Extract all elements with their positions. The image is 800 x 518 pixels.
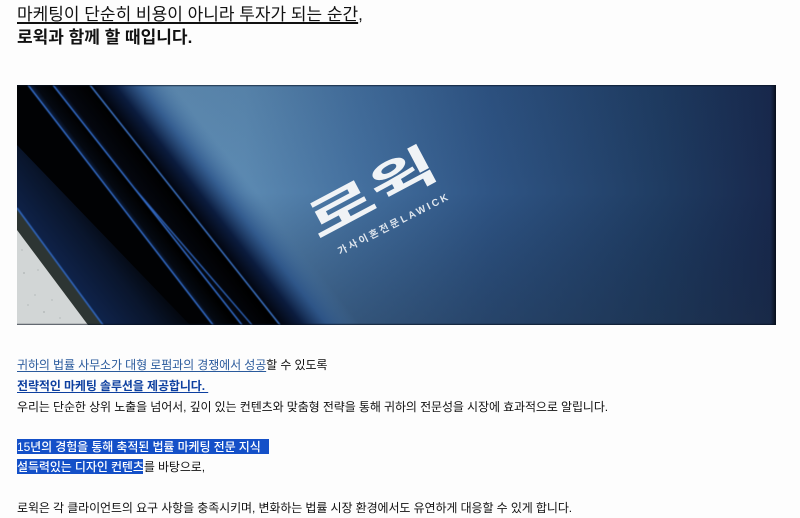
concrete speckle bbox=[22, 250, 60, 318]
heading line 1: 마케팅이 단순히 비용이 아니라 투자가 되는 순간, bbox=[17, 5, 363, 24]
highlighted line 2: 설득력있는 디자인 컨텐츠를 바탕으로, bbox=[17, 460, 205, 474]
logo tagline: 가사이혼전문LAWICK bbox=[335, 190, 451, 258]
hero image: blue panel with logo bbox=[17, 85, 776, 325]
concrete corner bbox=[17, 208, 103, 325]
heading line 2: 로윅과 함께 할 때입니다. bbox=[17, 28, 192, 47]
background gradient bbox=[17, 85, 776, 325]
highlighted line 1: 15년의 경험을 통해 축적된 법률 마케팅 전문 지식 bbox=[17, 440, 261, 454]
highlight bar 1 bbox=[17, 439, 269, 454]
diagonal shadow beside the bands bbox=[90, 85, 405, 325]
black diagonal bands bbox=[17, 85, 280, 325]
intro line 1: 귀하의 법률 사무소가 대형 로펌과의 경쟁에서 성공할 수 있도록 bbox=[17, 358, 327, 372]
closing line: 로윅은 각 클라이언트의 요구 사항을 충족시키며, 변화하는 법률 시장 환경에서도 유연하게 대응할 수 있게 합니다. bbox=[17, 501, 572, 515]
edge shading bbox=[17, 85, 776, 325]
blue edge highlights bbox=[17, 85, 280, 325]
intro line 2: bold blue: 전략적인 마케팅 솔루션을 제공합니다. bbox=[17, 379, 205, 393]
highlight bar 2 bbox=[17, 459, 143, 474]
intro line 3: 우리는 단순한 상위 노출을 넘어서, 깊이 있는 컨텐츠와 맞춤형 전략을 통해 귀하의 전문성을 시장에 효과적으로 알립니다. bbox=[17, 400, 608, 414]
logo wordmark: 로윅 bbox=[298, 137, 446, 249]
